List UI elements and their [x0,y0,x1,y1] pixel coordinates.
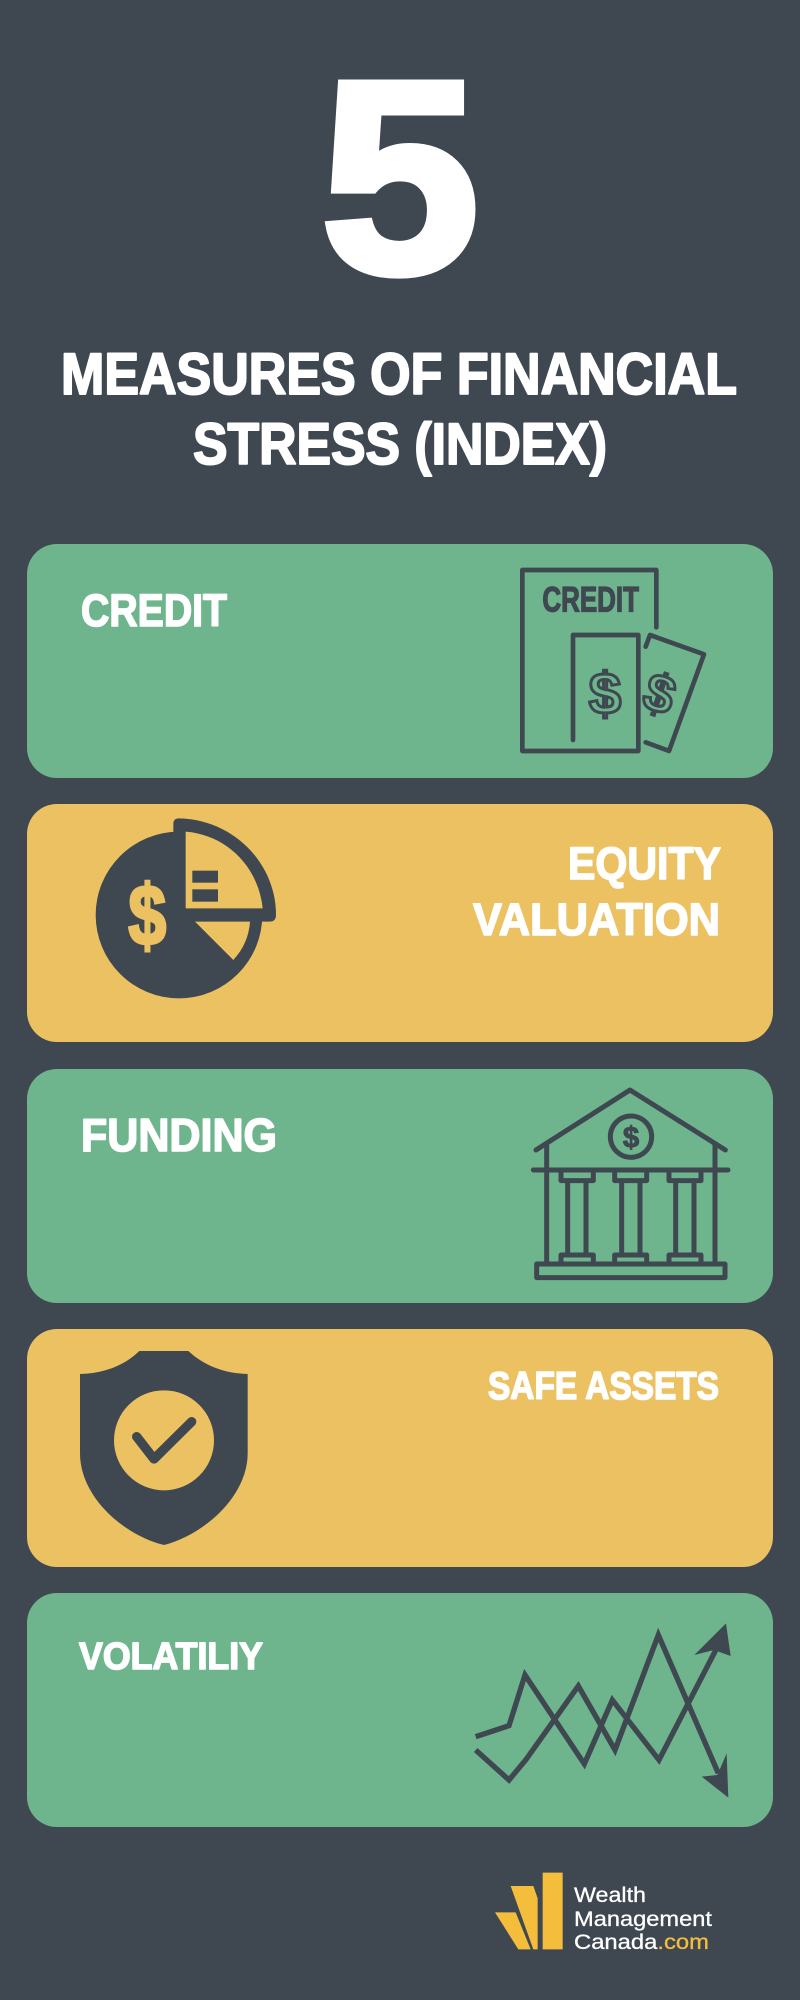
logo text [574,1884,712,1954]
icon: pie chart with dollar sign [96,818,276,998]
title: MEASURES OF FINANCIAL [61,342,737,407]
panel: volatility [27,1593,773,1827]
heading: equity valuation: EQUITY [568,838,721,889]
icon: bank building [533,1090,728,1278]
icon: volatile line chart with arrows [476,1623,731,1798]
heading: funding: FUNDING [81,1109,277,1161]
icon: credit document with banknotes: CREDIT [542,581,639,620]
heading: equity valuation: VALUATION [473,894,720,945]
logo text: Management [574,1908,712,1931]
title [61,342,737,477]
heading: volatiliy: VOLATILIY [79,1636,263,1678]
icon: credit document with banknotes: $ [589,661,621,726]
heading: safe assets: SAFE ASSETS [488,1365,719,1408]
heading: credit: CREDIT [81,585,227,636]
icon: pie chart with dollar sign: $ [128,868,166,963]
logo text: Canada .com [574,1931,709,1954]
heading: equity valuation [473,838,721,945]
logo text: Wealth [574,1884,646,1907]
icon: shield with check mark [80,1351,248,1545]
panel: credit [27,544,773,778]
icon: bank building: $ [623,1121,639,1154]
panel: equity valuation [27,804,773,1042]
title: STRESS (INDEX) [193,412,607,477]
logo mark [495,1873,563,1949]
logo: Wealth Management Canada [495,1873,712,1954]
icon: credit document with banknotes [522,570,704,751]
panel: safe assets [27,1329,773,1567]
panel: funding [27,1069,773,1303]
big numeral 5: 5 [321,25,479,331]
icon: credit document with banknotes: $ [636,662,683,727]
